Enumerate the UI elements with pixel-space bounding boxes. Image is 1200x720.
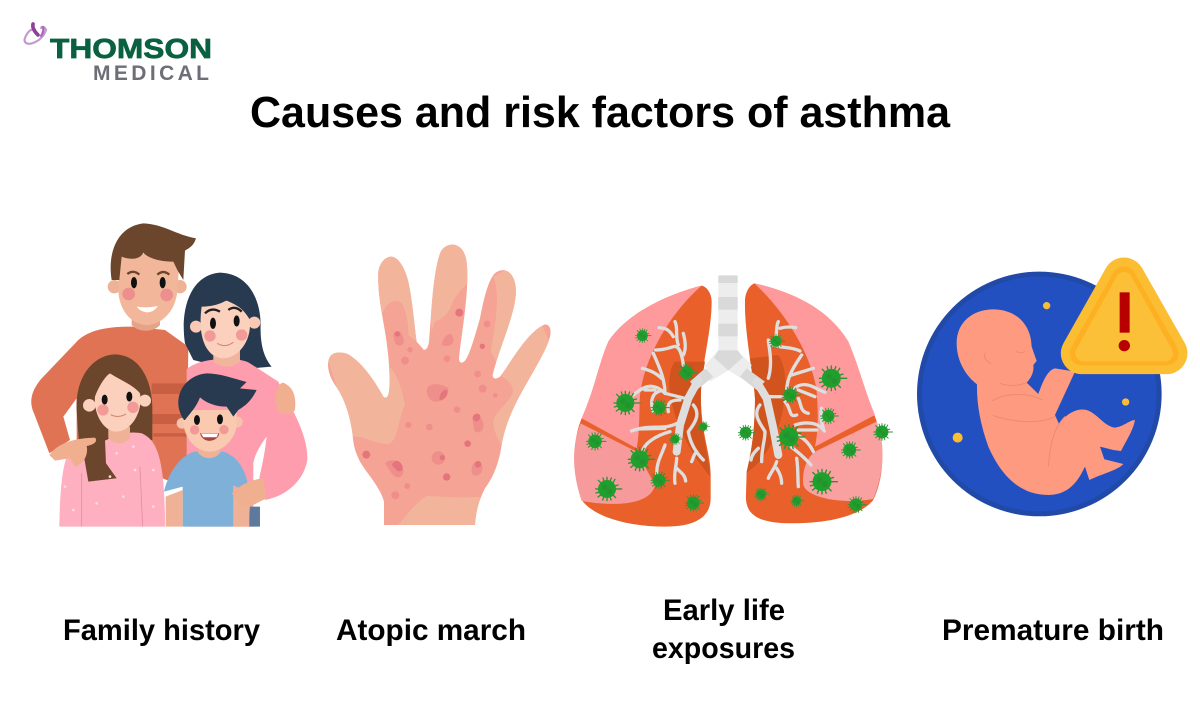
bronchi — [632, 322, 825, 487]
label: premature birth: Premature birth — [942, 614, 1164, 647]
panel: family history illustration — [31, 223, 307, 527]
viruses — [586, 329, 893, 513]
label: early life exposures — [652, 594, 795, 665]
left lung — [574, 286, 712, 527]
womb circle — [917, 272, 1162, 516]
hand — [328, 244, 550, 525]
man sweater — [31, 327, 188, 480]
label: early life exposures: exposures — [652, 632, 795, 665]
panel: atopic march hand illustration — [328, 244, 550, 525]
label: early life exposures: Early life — [663, 594, 785, 627]
boy — [164, 373, 267, 527]
logo wordmark: THOMSON — [50, 33, 212, 64]
label: atopic march: Atopic march — [336, 614, 526, 647]
man head — [108, 223, 196, 331]
icon: butterfly — [25, 24, 46, 44]
woman — [184, 273, 307, 527]
girl — [49, 354, 165, 527]
title: Causes and risk factors of asthma — [250, 88, 951, 137]
trachea — [690, 275, 765, 390]
panel: premature birth illustration — [917, 272, 1167, 516]
fetus — [957, 309, 1135, 495]
right lung — [745, 283, 883, 523]
panel: early life exposures lungs illustration — [574, 275, 893, 527]
label: family history: Family history — [63, 614, 260, 647]
rash spots — [385, 321, 498, 499]
logo subtitle: MEDICAL — [93, 62, 209, 85]
warning triangle — [1082, 278, 1167, 353]
logo: Thomson Medical — [25, 24, 212, 85]
